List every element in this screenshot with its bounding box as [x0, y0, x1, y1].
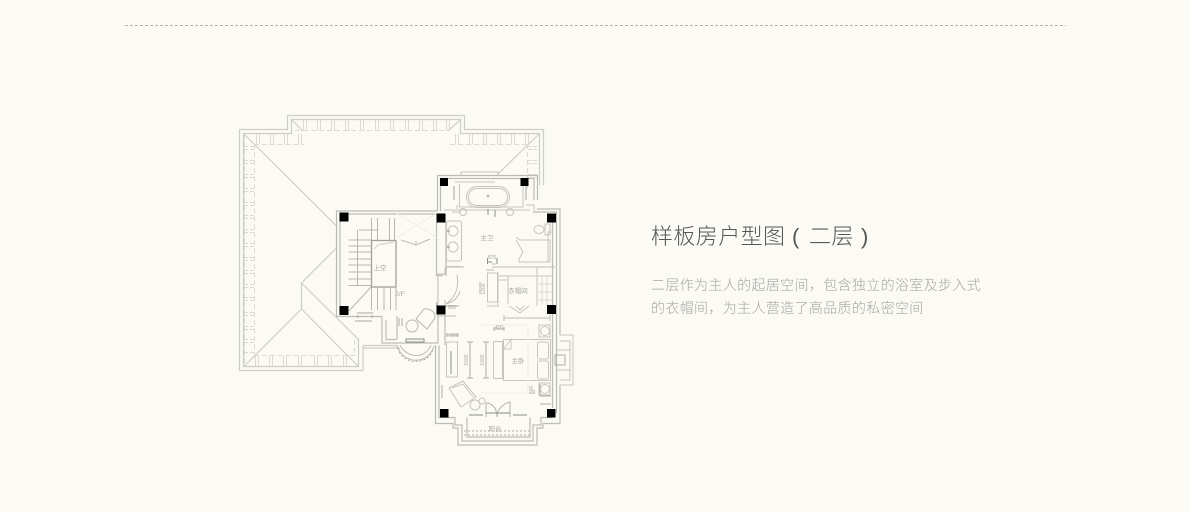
bay window — [555, 335, 573, 385]
armchair — [449, 381, 476, 407]
lounge chairs — [399, 309, 435, 332]
description text: 二层作为主人的起居空间，包含独立的浴室及步入式 — [651, 277, 981, 293]
room labels — [374, 233, 535, 433]
heading: 样板房户型图 — [651, 224, 785, 249]
dimension: 500 upper: 500 — [448, 305, 456, 311]
description text: 的衣帽间，为主人营造了高品质的私密空间 — [651, 300, 924, 316]
floor plan — [240, 116, 573, 445]
stairs — [348, 218, 396, 311]
bathtub — [466, 186, 510, 208]
dimension: 400: 400 — [495, 325, 503, 331]
bed — [494, 340, 550, 380]
heading — [651, 224, 869, 249]
dimension: 1500: 1500 — [464, 354, 470, 366]
heading: ( — [792, 224, 800, 249]
master bedroom — [442, 306, 551, 417]
dimension: 600: 600 — [529, 386, 535, 394]
label: wardrobe: 衣帽间 — [508, 286, 528, 295]
tower balcony — [397, 339, 434, 362]
dimension: 500 lower: 500 — [449, 333, 457, 339]
walls — [336, 176, 560, 445]
heading: 二层 — [809, 224, 854, 249]
corridor doors — [355, 213, 460, 321]
dimension: 870: 870 — [488, 255, 496, 261]
toilet — [534, 224, 550, 235]
heading: ) — [861, 224, 869, 249]
label: balcony: 阳台 — [488, 424, 502, 433]
balcony railing — [464, 431, 531, 435]
bedside tables — [539, 325, 550, 395]
wardrobe room — [480, 267, 552, 321]
label: void: 上空 — [374, 263, 387, 272]
roof outline — [240, 116, 544, 370]
bathroom — [444, 172, 555, 274]
structural columns — [340, 178, 556, 418]
dimension: 1200: 1200 — [481, 283, 487, 295]
dimension: 1600: 1600 — [480, 354, 486, 366]
washbasins — [446, 221, 462, 261]
roof rafters — [244, 120, 537, 366]
description text — [651, 277, 981, 316]
label: master bath: 主卫 — [480, 233, 494, 242]
label: 2F: 2/F — [395, 291, 405, 298]
label: master bedroom: 主卧 — [512, 356, 525, 365]
